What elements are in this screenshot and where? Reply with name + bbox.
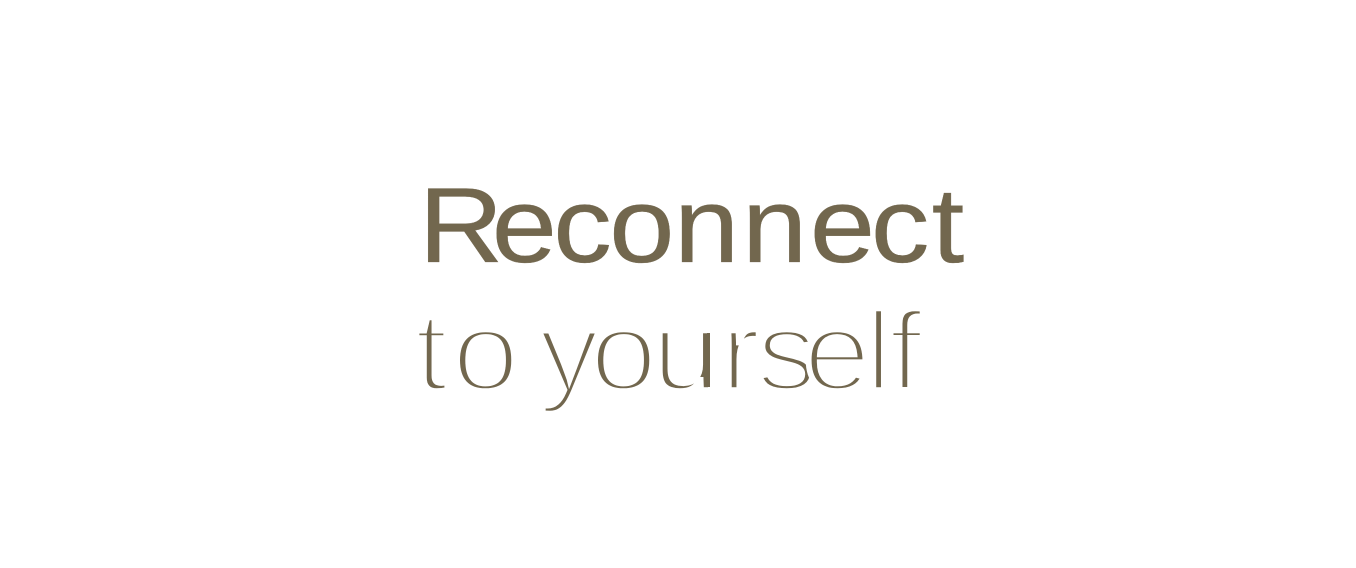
subheading: to yourself: to yourself bbox=[415, 288, 923, 414]
heading: Reconnect: Reconnect bbox=[419, 165, 964, 285]
